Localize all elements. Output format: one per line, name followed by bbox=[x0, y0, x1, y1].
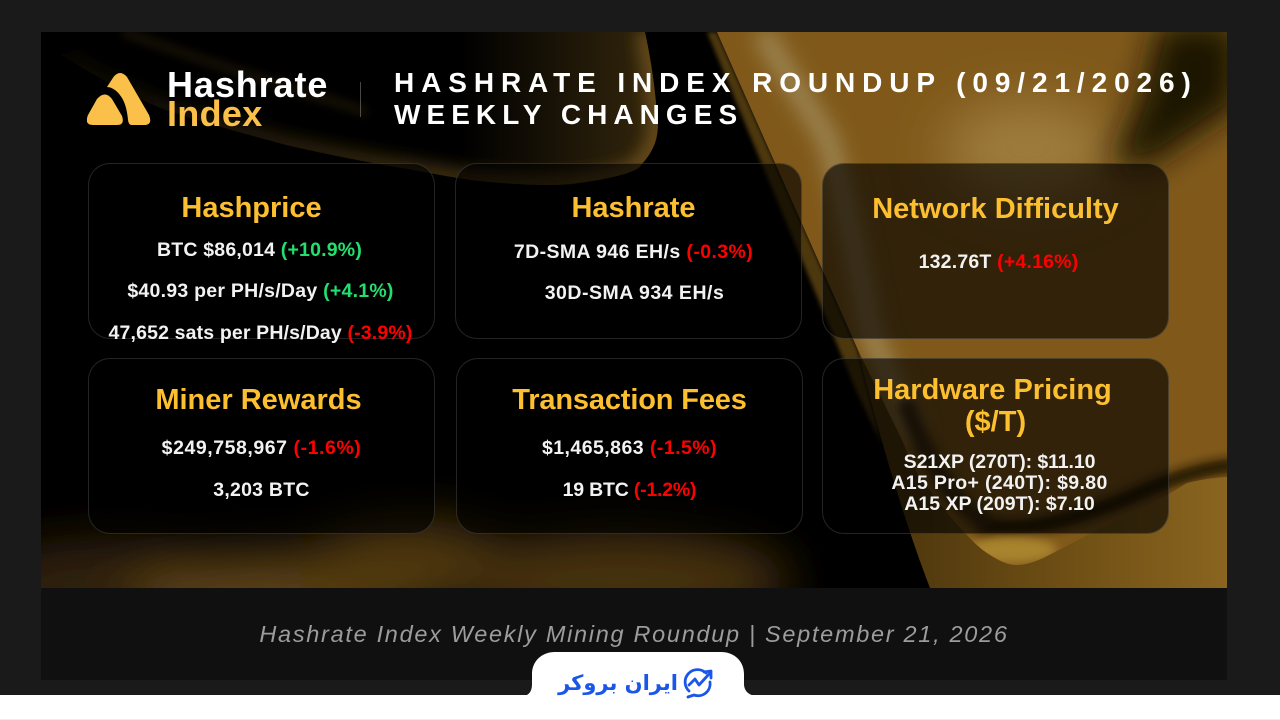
panel: hashprice: $40.93 per PH/s/Day (+4.1%) bbox=[127, 280, 394, 302]
panel: transaction fees: 19 BTC (-1.2%) bbox=[563, 479, 696, 501]
heading: ($/T) bbox=[965, 406, 1026, 438]
panel: miner rewards bbox=[88, 358, 435, 534]
panel: hashrate bbox=[455, 163, 802, 339]
stat lines: 7D-SMA 946 EH/s (-0.3%) bbox=[514, 241, 753, 263]
panel: transaction fees bbox=[456, 358, 803, 534]
broker name: ایران بروکر bbox=[558, 671, 678, 695]
panel: hashrate: 30D-SMA 934 EH/s bbox=[545, 282, 724, 304]
stat lines: A15 Pro+ (240T): $9.80 bbox=[891, 472, 1108, 494]
title: HASHRATE INDEX ROUNDUP (09/21/2026) bbox=[394, 67, 1198, 98]
icon: broker chart bbox=[684, 668, 712, 698]
lower gold sheet bbox=[717, 32, 1227, 588]
stat lines: $249,758,967 (-1.6%) bbox=[162, 437, 361, 459]
stat lines: $1,465,863 (-1.5%) bbox=[542, 437, 717, 459]
panel: hashprice: 47,652 sats per PH/s/Day (-3.9%) bbox=[109, 322, 412, 344]
heading: Hashprice bbox=[181, 192, 322, 224]
panel: hardware pricing bbox=[822, 358, 1169, 534]
heading bbox=[873, 374, 1112, 438]
broker tab bbox=[527, 652, 752, 695]
footer band bbox=[41, 588, 1227, 680]
heading: Hardware Pricing bbox=[873, 374, 1112, 406]
heading: Network Difficulty bbox=[872, 193, 1119, 225]
background artwork bbox=[41, 32, 1227, 588]
title: WEEKLY CHANGES bbox=[394, 99, 743, 130]
panel: hashprice bbox=[88, 163, 435, 339]
title bbox=[394, 67, 1198, 130]
heading: Hashrate bbox=[571, 192, 696, 224]
stat line: 132.76T (+4.16%) bbox=[919, 251, 1078, 273]
logo wordmark: Index bbox=[167, 92, 263, 134]
panel: network difficulty bbox=[822, 163, 1169, 339]
white bottom strip bbox=[0, 695, 1280, 720]
footer caption: Hashrate Index Weekly Mining Roundup | September 21, 2026 bbox=[259, 621, 1009, 647]
logo wordmark bbox=[167, 64, 328, 134]
logo wordmark: Hashrate bbox=[167, 64, 328, 105]
stat lines: A15 XP (209T): $7.10 bbox=[904, 493, 1095, 515]
stat lines bbox=[891, 451, 1108, 515]
panel: miner rewards: 3,203 BTC bbox=[213, 479, 310, 501]
heading: Miner Rewards bbox=[155, 384, 362, 416]
header separator bbox=[360, 82, 361, 117]
heading: Transaction Fees bbox=[512, 384, 747, 416]
logo mark bbox=[87, 73, 150, 125]
stat lines: BTC $86,014 (+10.9%) bbox=[157, 239, 362, 261]
stat lines: S21XP (270T): $11.10 bbox=[904, 451, 1095, 473]
bottom glow bbox=[0, 520, 790, 640]
top-left swoosh bbox=[84, 32, 658, 185]
upper gold sheet bbox=[700, 22, 1240, 572]
